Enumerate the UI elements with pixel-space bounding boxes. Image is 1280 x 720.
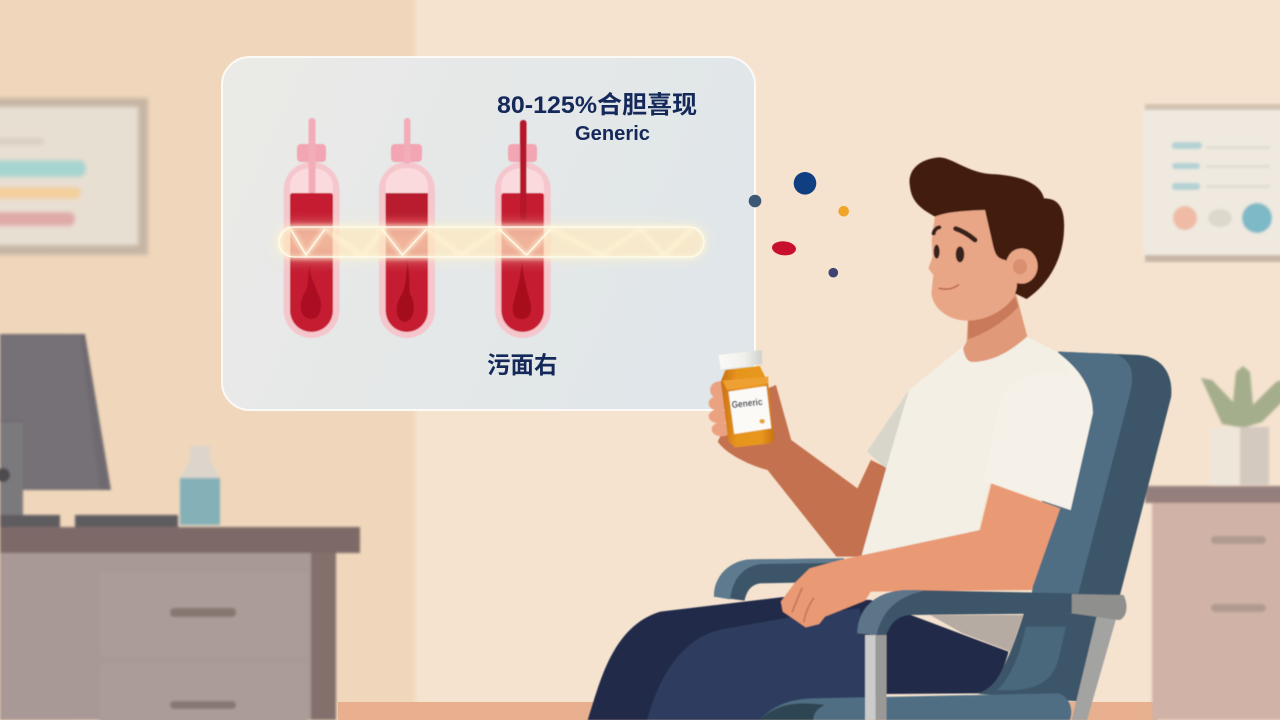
floating pill dots (749, 172, 849, 278)
body, chair, bottle (scaled local coordinates) (588, 337, 1171, 720)
monitor (0, 334, 178, 527)
rear chair leg (1072, 613, 1118, 720)
plant (1201, 366, 1280, 485)
bottle label text: Generic (731, 397, 763, 411)
heading: range label: 80-125%合胆喜现 (497, 91, 697, 119)
panel: bioequivalence comparison (222, 57, 755, 410)
medicine bottle (719, 350, 774, 447)
desk body (0, 527, 360, 720)
far arm (718, 385, 888, 557)
cabinet (1145, 486, 1280, 720)
near armrest (857, 590, 1126, 635)
label: Generic: Generic (575, 123, 650, 145)
desk with monitor and bottle (0, 334, 360, 720)
tube 2 (379, 118, 435, 338)
chair seat (760, 693, 1071, 720)
person seated in chair (588, 157, 1171, 720)
glowing acceptance range band (276, 225, 706, 259)
shirt hem (930, 615, 1023, 652)
label: bottom caption: 污面右 (487, 352, 558, 378)
wall poster right (1143, 104, 1280, 262)
near arm and hand (781, 483, 1060, 627)
shirt (861, 337, 1093, 557)
tube 1 (284, 118, 340, 338)
hand fingers (709, 381, 732, 436)
far armrest (714, 558, 844, 601)
neck and head (909, 157, 1064, 363)
legs (588, 597, 1009, 720)
blue bottle (180, 446, 220, 525)
plant and cabinet right (1145, 366, 1280, 720)
front chair leg (865, 635, 887, 720)
chair back (978, 352, 1171, 702)
tube 3 (495, 120, 551, 338)
wall poster left (0, 98, 148, 255)
